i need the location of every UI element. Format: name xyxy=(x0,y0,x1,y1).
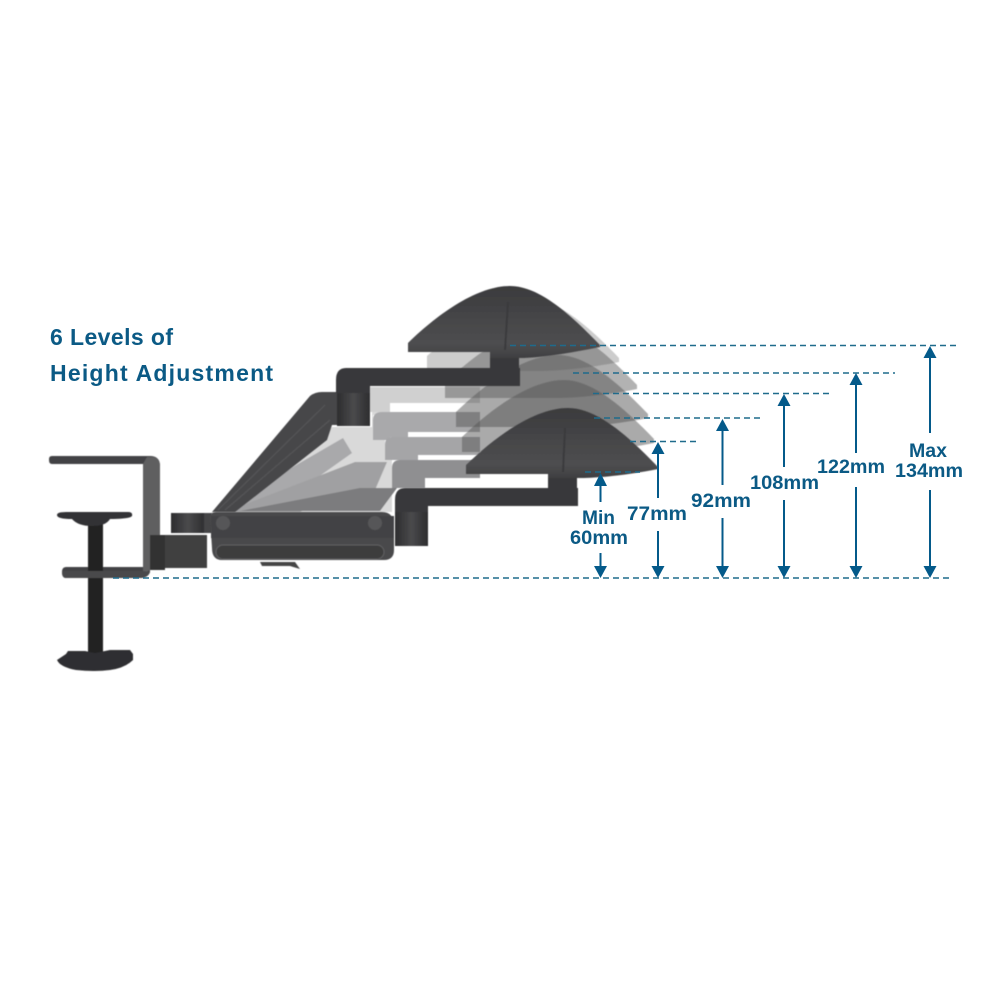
measure: min 60mm: 60mm xyxy=(570,528,628,549)
armrest highest position xyxy=(212,286,600,512)
ghost links xyxy=(215,438,397,512)
base link xyxy=(210,512,394,569)
ghost pad 2 xyxy=(427,299,619,371)
measure: max 134mm: 134mm xyxy=(895,461,963,482)
desk clamp xyxy=(49,456,212,671)
measure: min 60mm xyxy=(570,473,628,578)
lower pad ridge xyxy=(563,428,565,472)
measure: 108mm xyxy=(750,394,819,578)
ghost pad 4 xyxy=(456,355,648,427)
slanted link xyxy=(212,392,337,512)
base band xyxy=(211,516,394,538)
ghost arms xyxy=(370,387,480,488)
clamp knob xyxy=(57,650,133,671)
measure: 77mm xyxy=(627,442,687,578)
upper pad stem xyxy=(490,348,519,370)
clamp side face xyxy=(143,457,160,574)
heading xyxy=(50,324,273,386)
base slot xyxy=(216,545,384,559)
dashed level lines xyxy=(113,346,958,578)
clamp bracket xyxy=(49,456,160,578)
lower pad stem xyxy=(548,470,577,490)
lower horizontal arm xyxy=(395,488,578,513)
heading: 6 Levels of xyxy=(50,324,173,350)
clamp lower arm front xyxy=(62,571,150,578)
upper post xyxy=(337,392,370,426)
slanted link highlights xyxy=(218,405,330,510)
measure: 77mm: 77mm xyxy=(627,504,687,525)
clamp pressure disk xyxy=(57,512,132,526)
ghost pad 3 xyxy=(445,326,637,398)
measure: 92mm xyxy=(691,419,751,578)
upper horizontal arm xyxy=(336,368,520,393)
measure: max 134mm: Max xyxy=(909,441,947,462)
measure: max 134mm xyxy=(895,346,963,578)
base lever xyxy=(260,562,300,569)
ghost pad 5 xyxy=(462,380,654,452)
heading: Height Adjustment xyxy=(50,360,273,386)
upper pad xyxy=(408,286,600,358)
measure: 122mm: 122mm xyxy=(817,457,885,478)
upper pad ridge xyxy=(505,302,508,350)
measure: min 60mm: Min xyxy=(582,508,615,529)
ghost pads xyxy=(427,299,654,452)
clamp hinge xyxy=(150,513,212,570)
measure: 108mm: 108mm xyxy=(750,473,819,494)
base pivots xyxy=(216,516,382,530)
measure: 122mm xyxy=(817,373,885,578)
clamp screw xyxy=(88,522,103,654)
armrest lowest position xyxy=(395,408,658,546)
lower post xyxy=(395,512,428,546)
light ghost backdrop xyxy=(232,387,392,512)
support arm ghost positions xyxy=(215,387,480,512)
lower pad xyxy=(466,408,658,478)
measure: 92mm: 92mm xyxy=(691,491,751,512)
